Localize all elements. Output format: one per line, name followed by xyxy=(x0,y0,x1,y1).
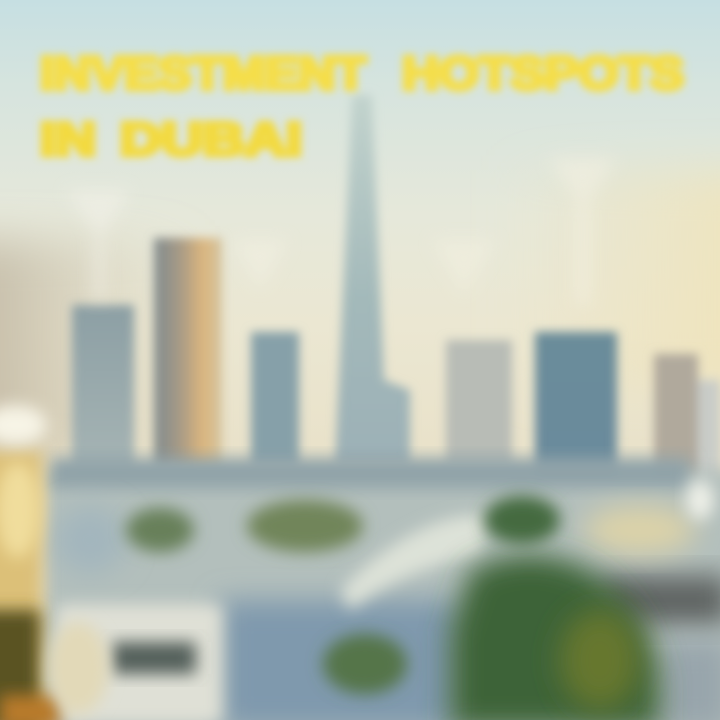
pin 2 xyxy=(232,240,288,290)
title line 2 xyxy=(40,113,302,165)
building: small blue tower xyxy=(251,332,299,467)
skyline buildings xyxy=(72,95,720,490)
title line 2: IN xyxy=(40,113,96,165)
pin 1 xyxy=(66,190,130,300)
building: blue block tower xyxy=(535,332,617,482)
tree: mid left xyxy=(126,508,194,552)
pin 4 xyxy=(548,158,616,305)
trees xyxy=(126,496,660,720)
pin 3 xyxy=(432,240,496,295)
tree: lower centre xyxy=(323,634,407,694)
title xyxy=(40,47,684,165)
map pin markers xyxy=(66,158,616,305)
title line 2: DUBAI xyxy=(120,113,302,165)
tree: large palm right xyxy=(450,555,660,720)
building: far left tower xyxy=(72,305,134,470)
tree: mid centre xyxy=(247,500,363,552)
building: tall central spire xyxy=(335,95,410,465)
foreground white building xyxy=(56,604,222,720)
building: gold tower xyxy=(154,238,222,468)
title line 1: HOTSPOTS xyxy=(402,47,684,99)
title line 1: INVESTMENT xyxy=(40,47,366,99)
ground and waterfront band xyxy=(44,458,720,720)
left golden foliage xyxy=(0,405,108,720)
title line 1 xyxy=(40,47,684,99)
building: right warm tower xyxy=(654,354,698,484)
building: pale mid tower xyxy=(446,340,512,465)
